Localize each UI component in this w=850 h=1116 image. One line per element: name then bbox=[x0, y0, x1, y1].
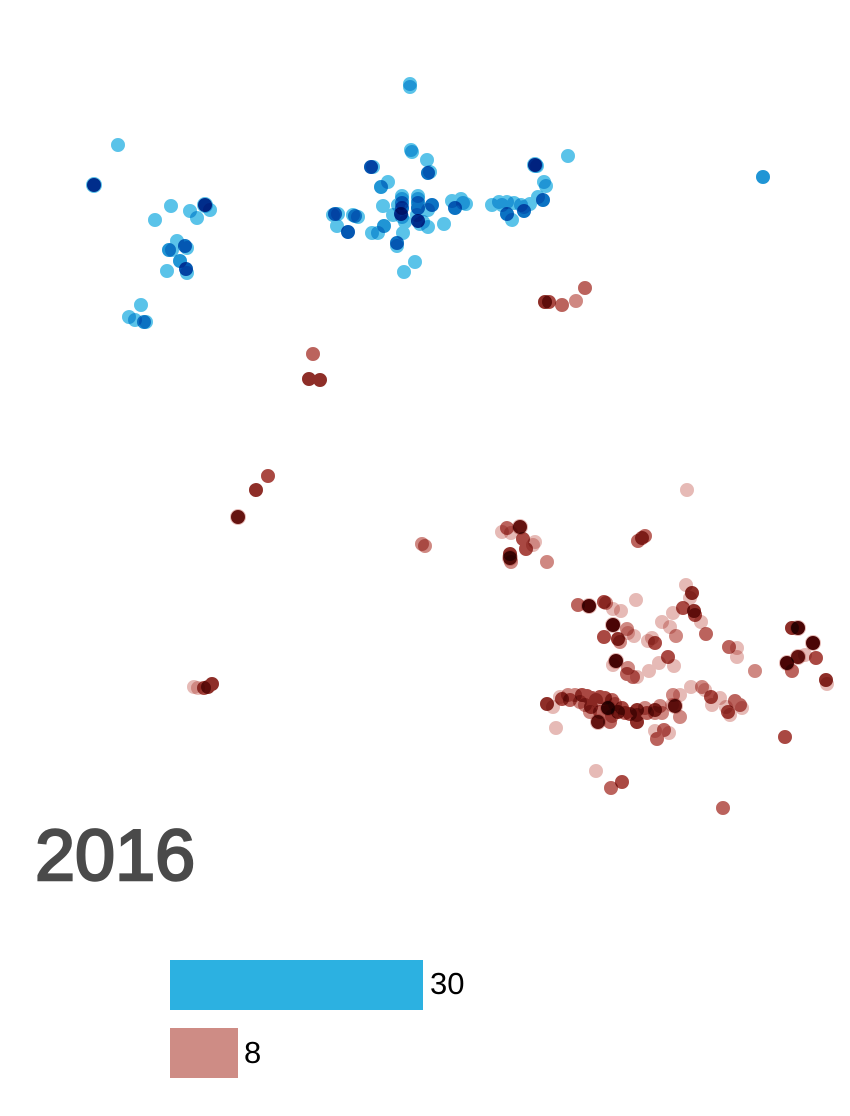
blue dots: centre cluster bbox=[333, 84, 444, 272]
bar: red count 8 bbox=[170, 1028, 261, 1078]
red dots: main south-east cluster bbox=[547, 585, 785, 808]
year title: 2016 bbox=[35, 816, 195, 896]
bar: blue count 30 bbox=[170, 960, 464, 1010]
red dots: top and middle groups bbox=[194, 288, 687, 688]
blue dots: right cluster bbox=[452, 156, 763, 220]
bar: blue count 30: 30 bbox=[430, 966, 464, 1001]
bar: red count 8: 8 bbox=[244, 1035, 261, 1070]
red dots: far-right dense group bbox=[787, 628, 827, 684]
blue dots: left cluster bbox=[94, 145, 210, 322]
